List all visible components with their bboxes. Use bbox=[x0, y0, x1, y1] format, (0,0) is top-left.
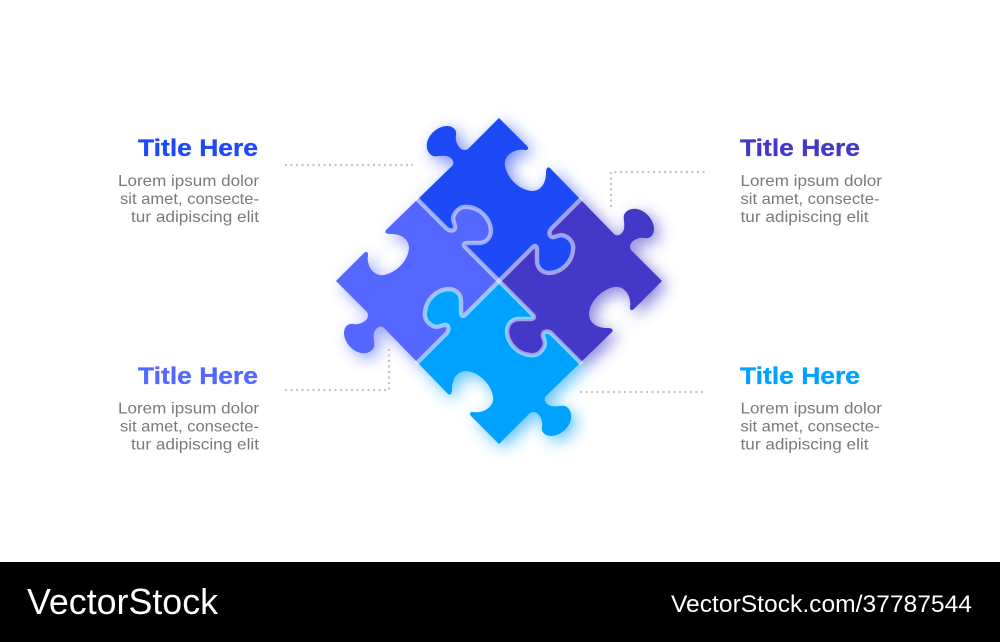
body text: tur adipiscing elit bbox=[131, 209, 260, 226]
heading: Title Here bbox=[138, 363, 258, 390]
puzzle piece: right, indigo bbox=[499, 199, 662, 363]
text block: top right bbox=[740, 135, 883, 226]
body text bbox=[740, 173, 883, 226]
puzzle diagram bbox=[336, 118, 667, 449]
body text: Lorem ipsum dolor bbox=[118, 400, 260, 418]
body text: tur adipiscing elit bbox=[740, 209, 869, 226]
connector: top right bbox=[611, 172, 706, 207]
watermark url: VectorStock.com/37787544 bbox=[671, 591, 972, 618]
connector: bottom right bbox=[580, 391, 706, 393]
body text bbox=[118, 400, 260, 454]
body text: sit amet, consecte- bbox=[740, 191, 880, 208]
watermark bar bbox=[0, 562, 1000, 642]
body text: Lorem ipsum dolor bbox=[740, 173, 883, 190]
body text: Lorem ipsum dolor bbox=[118, 173, 260, 190]
text block: bottom left bbox=[118, 363, 260, 454]
body text: sit amet, consecte- bbox=[120, 191, 259, 208]
light seams between the pieces bbox=[416, 198, 582, 364]
body text: Lorem ipsum dolor bbox=[740, 400, 883, 418]
connector: bottom left bbox=[285, 349, 389, 390]
body text: tur adipiscing elit bbox=[740, 436, 869, 454]
watermark logo text: VectorStock bbox=[27, 581, 219, 622]
puzzle piece: left, periwinkle bbox=[336, 199, 499, 363]
heading: Title Here bbox=[740, 363, 860, 390]
body text: tur adipiscing elit bbox=[131, 436, 260, 454]
body text: sit amet, consecte- bbox=[120, 418, 259, 436]
body text bbox=[118, 173, 260, 226]
piece shadows bbox=[341, 123, 667, 449]
heading: Title Here bbox=[740, 135, 860, 162]
heading: Title Here bbox=[138, 135, 258, 162]
text block: top left bbox=[118, 135, 260, 226]
text block: bottom right bbox=[740, 363, 883, 454]
puzzle piece: bottom, cyan bbox=[417, 281, 581, 444]
puzzle piece: top, blue bbox=[417, 118, 581, 281]
body text: sit amet, consecte- bbox=[740, 418, 880, 436]
connector: top left bbox=[285, 164, 413, 166]
body text bbox=[740, 400, 883, 454]
